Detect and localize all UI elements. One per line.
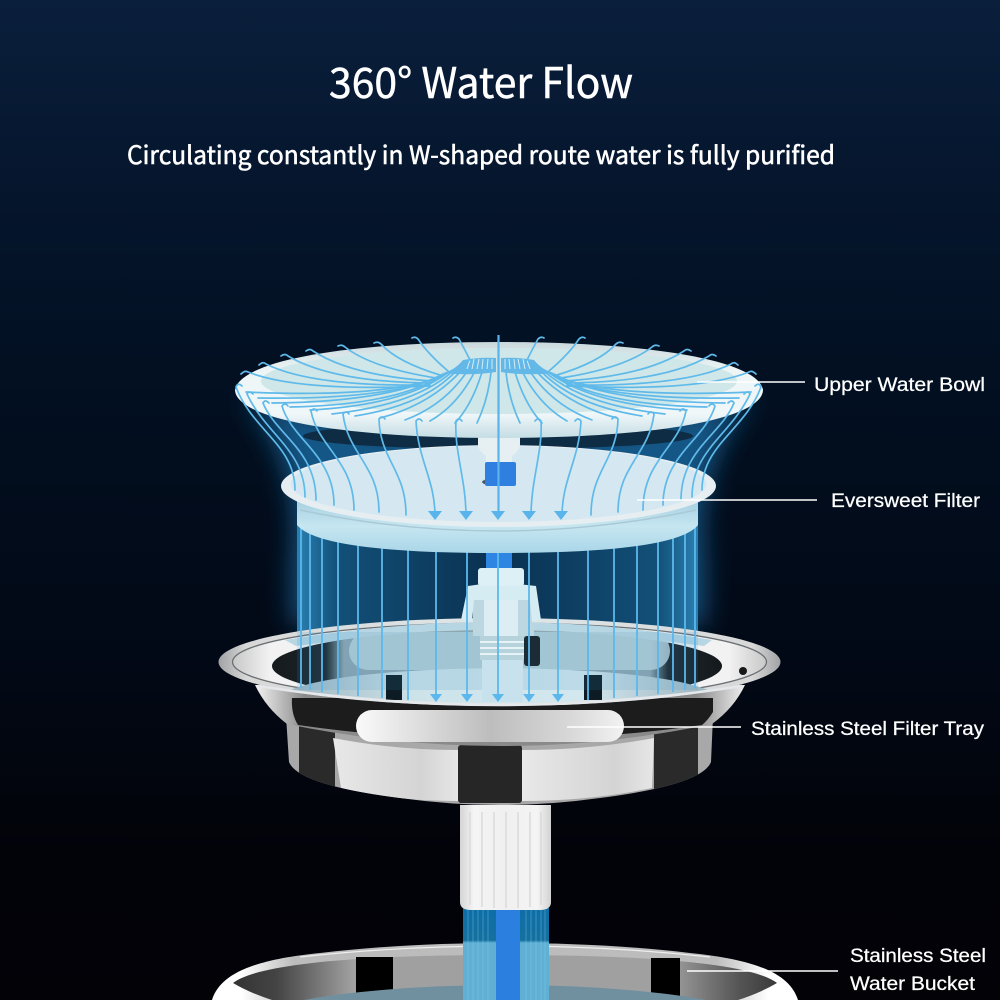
bucket rim highlight	[300, 946, 710, 957]
leader line	[567, 726, 741, 728]
thread clip shadow	[524, 636, 540, 666]
filter lip	[281, 445, 716, 527]
filter arrowheads	[428, 511, 568, 520]
translucent pill	[349, 632, 670, 670]
centre connector	[461, 552, 541, 702]
blue tube	[486, 552, 512, 570]
tray band dark left	[299, 726, 335, 786]
label text: Eversweet Filter	[831, 490, 981, 512]
tray dark band	[292, 698, 713, 740]
floor notch right	[584, 675, 602, 700]
nut wings	[461, 584, 541, 622]
tray band panel left	[333, 738, 458, 801]
collar	[478, 568, 524, 586]
tray floor	[290, 668, 708, 703]
filter body	[297, 500, 698, 553]
bucket slot right	[651, 958, 680, 1000]
bowl stem	[478, 432, 520, 486]
eversweet filter	[281, 445, 716, 553]
cylinder ribs	[470, 812, 541, 908]
thread ridges	[480, 642, 524, 654]
bucket outer rim	[212, 943, 798, 1000]
tray band dark right	[654, 728, 698, 789]
tray white pill	[356, 710, 624, 742]
cylinder body	[460, 805, 551, 910]
stainless steel filter tray	[218, 618, 780, 810]
leader line	[637, 499, 817, 501]
tray band pieces	[299, 726, 698, 803]
tray back rim	[285, 622, 712, 646]
blue cube	[485, 462, 516, 486]
tray rim	[218, 618, 780, 706]
centre line	[497, 335, 500, 518]
tray lower band	[286, 716, 713, 805]
tray interior	[272, 630, 722, 702]
label: water bucket	[687, 945, 986, 995]
label text: Stainless Steel Filter Tray	[751, 718, 984, 740]
leader line	[697, 381, 805, 383]
water bucket	[212, 943, 798, 1000]
nut body	[473, 592, 534, 636]
flow lines over bowl	[236, 335, 761, 520]
filter lip shade	[300, 510, 696, 531]
filter cylinder	[460, 805, 551, 910]
tray front lip	[258, 686, 742, 705]
stem body	[478, 432, 520, 462]
threads	[480, 636, 524, 660]
gap shade between bowl and filter	[303, 423, 693, 449]
bucket inner wall	[233, 955, 777, 1000]
falling water band	[297, 520, 698, 632]
label line two: Water Bucket	[850, 973, 976, 995]
water column into bucket	[463, 908, 549, 1000]
upper water bowl	[235, 342, 763, 438]
label line one: Stainless Steel	[850, 945, 986, 967]
leader line	[687, 970, 838, 972]
right half lines	[501, 337, 761, 516]
tray dark dot	[739, 667, 747, 675]
bowl rim	[235, 342, 763, 438]
column body	[463, 908, 549, 1000]
title: 360° Water Flow	[329, 50, 633, 111]
subtitle: Circulating constantly in W-shaped route water is fully purified	[127, 136, 835, 172]
left half lines	[236, 337, 496, 516]
bucket water surface	[304, 985, 706, 1000]
label text: Upper Water Bowl	[814, 374, 985, 396]
nut stem highlight	[484, 600, 518, 636]
vertical streams	[301, 525, 695, 700]
tray arrowheads	[430, 694, 564, 702]
central blue stream	[496, 908, 520, 1000]
filter media	[290, 446, 706, 522]
side glow of falling water	[245, 395, 752, 625]
glow shape	[245, 395, 752, 625]
blue tint inside tray	[297, 632, 698, 690]
filter hole shadow	[482, 478, 516, 486]
bowl water surface	[261, 348, 737, 414]
column streaks	[468, 910, 545, 1000]
lower stem	[482, 655, 523, 702]
falling water lines	[301, 525, 695, 702]
tray bowl flare	[255, 685, 745, 746]
tray band panel right	[522, 738, 654, 801]
bucket slot left	[356, 957, 393, 1000]
tray flange	[232, 623, 766, 701]
floor notch left	[386, 675, 402, 700]
tray band dark centre	[458, 745, 522, 803]
